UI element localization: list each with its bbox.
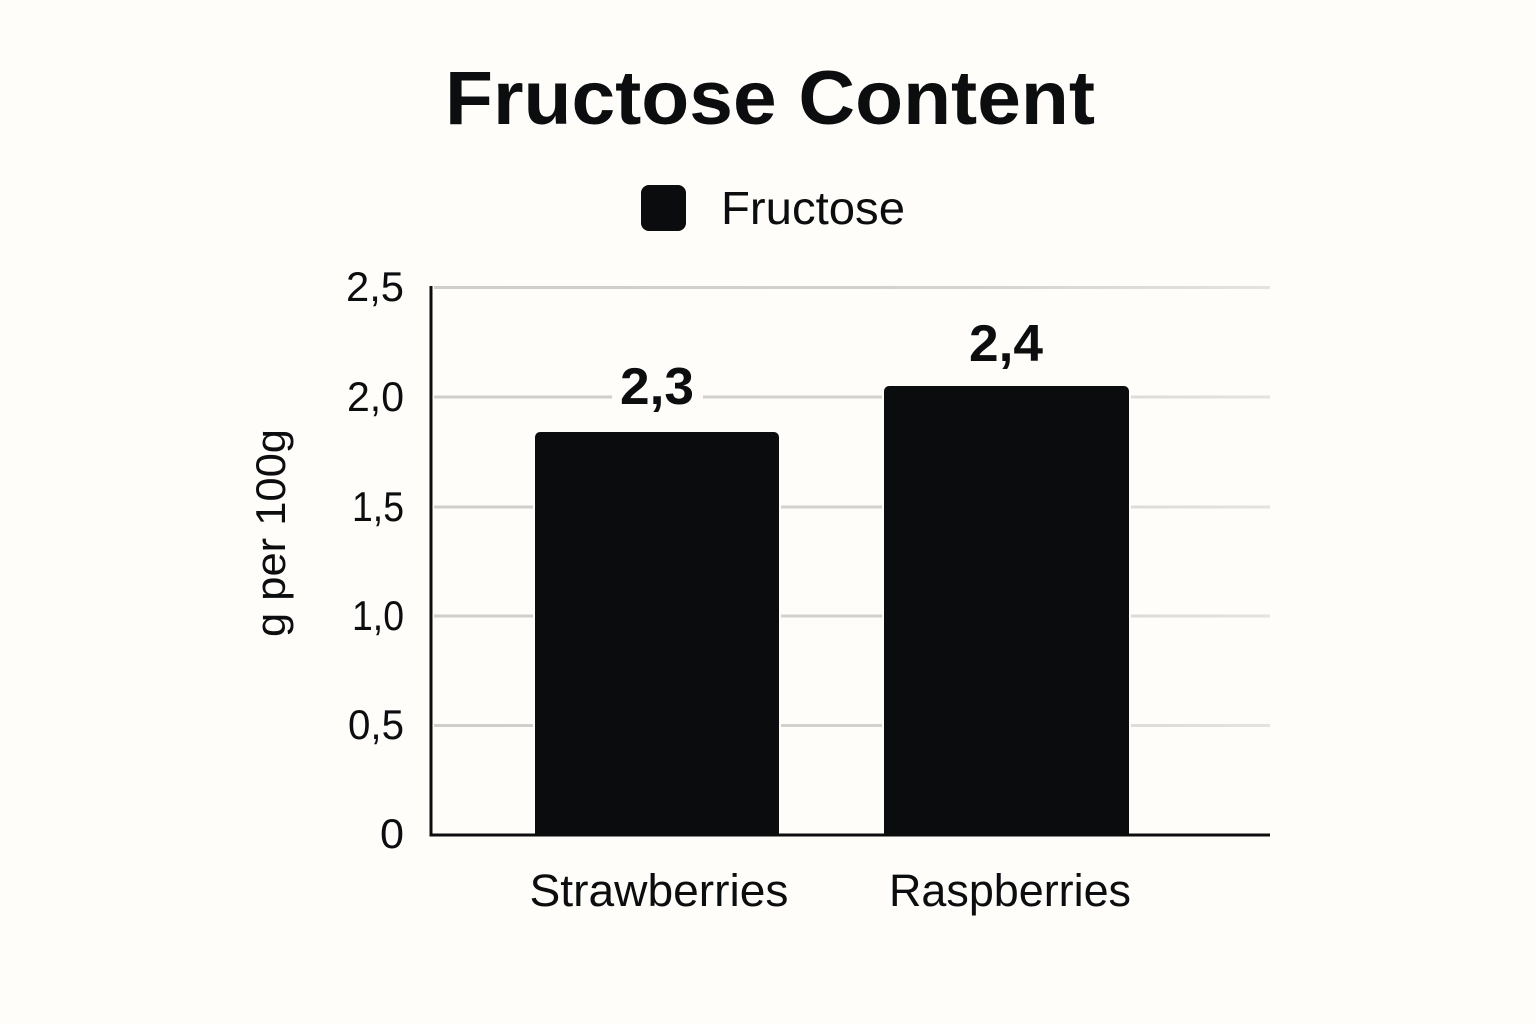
- legend: [641, 182, 905, 234]
- y axis title: g per 100g: [247, 429, 294, 637]
- y axis tick labels: 2,0: [347, 373, 404, 420]
- x label: strawberries: Strawberries: [530, 865, 788, 916]
- y axis tick labels: 1,0: [352, 592, 404, 639]
- legend label: Fructose: [721, 182, 905, 234]
- bar: strawberries: [533, 430, 781, 835]
- y axis tick labels: 1,5: [352, 483, 404, 530]
- bar: raspberries: [882, 384, 1131, 835]
- title: Fructose Content: [445, 56, 1095, 141]
- x label: raspberries: Raspberries: [889, 865, 1131, 916]
- value label: strawberries: 2,3: [620, 358, 694, 416]
- grid lines: [434, 286, 1270, 727]
- value label: raspberries: 2,4: [969, 315, 1043, 373]
- y axis tick labels: 0,5: [348, 701, 404, 748]
- y axis tick labels: [346, 263, 404, 857]
- axes: [431, 286, 1270, 835]
- legend swatch: [641, 185, 686, 231]
- y axis tick labels: 2,5: [346, 263, 404, 310]
- y axis tick labels: 0: [380, 810, 404, 857]
